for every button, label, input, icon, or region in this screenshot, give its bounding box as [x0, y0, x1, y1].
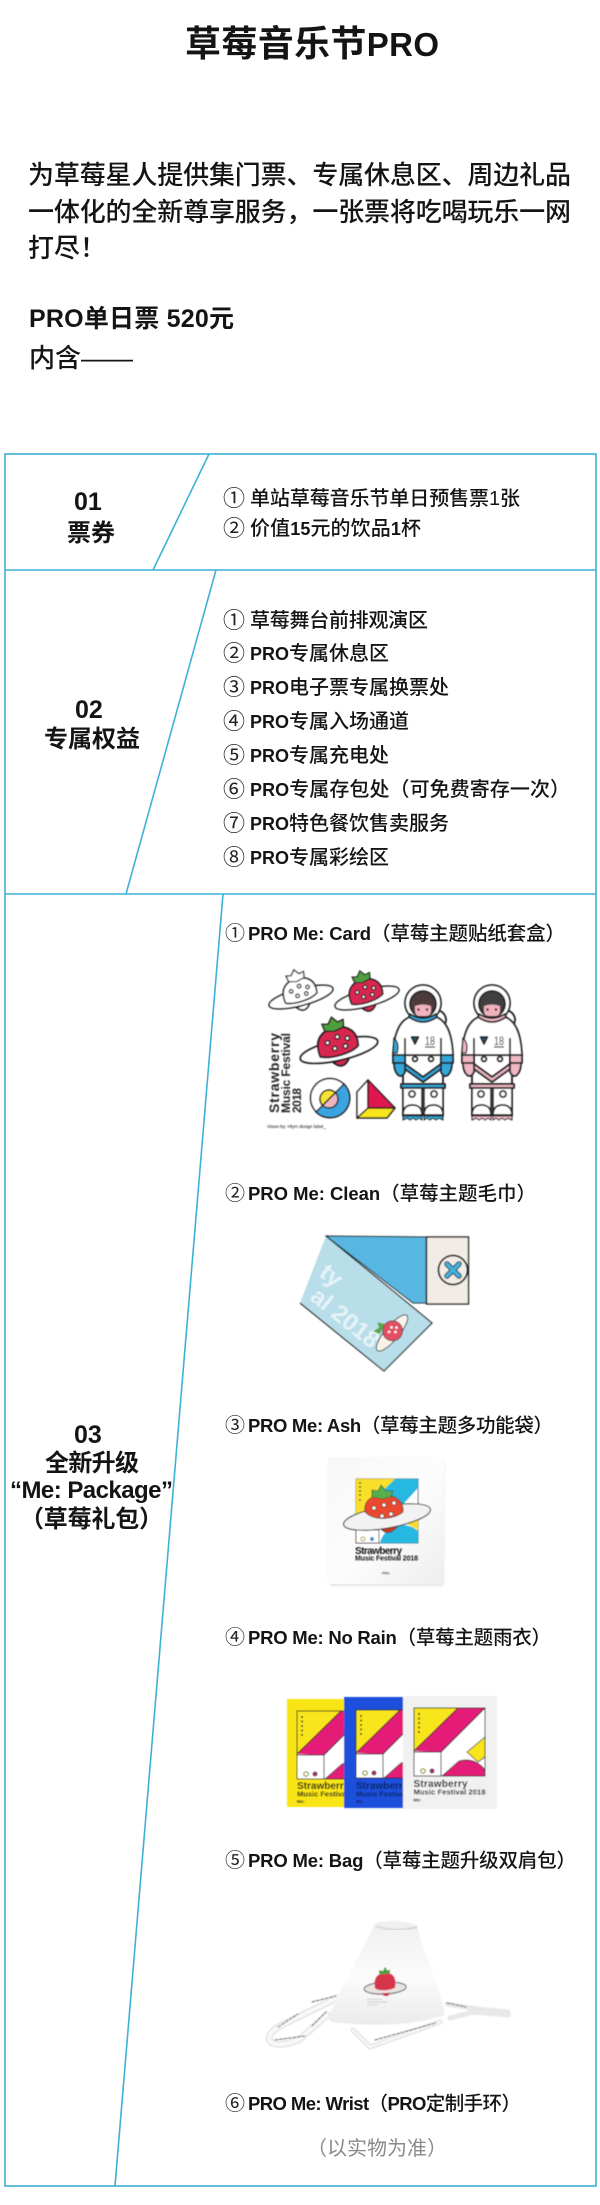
item 3 heading: PRO Me: Ash（草莓主题多功能袋） [248, 1415, 553, 1437]
price line: PRO单日票 520元 [29, 305, 234, 333]
towel cream end [426, 1237, 468, 1304]
row 03 label: “Me: Package” [10, 1477, 173, 1504]
white pack: Music Festival 2018 [414, 1788, 486, 1796]
row 02 list: PRO专属休息区 [250, 642, 389, 665]
row 02 list: 草莓舞台前排观演区 [250, 609, 428, 632]
intro paragraph: 一体化的全新尊享服务，一张票将吃喝玩乐一网 [28, 197, 571, 227]
row 02 list: PRO特色餐饮售卖服务 [250, 812, 449, 835]
illustration: drawstring backpack [269, 1921, 508, 2047]
row 02 list: PRO专属充电处 [250, 744, 389, 767]
blue pack: Me: [356, 1799, 364, 1804]
row 01 list [223, 486, 520, 541]
sticker: festival wordmark: 2018 [290, 1088, 304, 1113]
towel planet [363, 1304, 414, 1356]
sticker: large red planet [293, 1008, 381, 1074]
row 02 list: PRO专属彩绘区 [250, 846, 389, 869]
row 01 list: 单站草莓音乐节单日预售票1张 [250, 487, 520, 510]
panel: row 03 gift package [10, 922, 576, 2160]
yellow pack [287, 1699, 368, 1807]
row 02 label: 专属权益 [44, 726, 140, 753]
sticker: 3D triangle block [357, 1080, 395, 1118]
sticker: festival wordmark [266, 1033, 304, 1113]
blue pack: Strawberry [356, 1781, 409, 1792]
backpack small print [367, 1999, 387, 2005]
illustration: raincoat packs [287, 1696, 497, 1809]
row 03 label [10, 1421, 173, 1533]
row 02 list: ⑥ [223, 777, 245, 802]
row 02 list: ⑧ [223, 845, 245, 870]
row 02 list: ① [223, 608, 245, 633]
intro paragraph: 为草莓星人提供集门票、专属休息区、周边礼品 [28, 160, 571, 190]
item 1 heading: PRO Me: Card（草莓主题贴纸套盒） [248, 923, 565, 945]
row 01 list: ② [223, 516, 245, 541]
pouch shadow [329, 1459, 444, 1586]
sticker: red planet [328, 962, 402, 1019]
row 03 label: 03 [74, 1421, 102, 1449]
intro paragraph: 打尽！ [28, 233, 106, 263]
row 01 label: 01 [74, 488, 102, 516]
row 01 label [67, 488, 115, 547]
row 03 label: （草莓礼包） [20, 1506, 163, 1533]
sticker: pink astronaut: 18 [494, 1034, 504, 1048]
towel blue panel [326, 1236, 426, 1303]
backpack drawstring neck [376, 1926, 417, 1930]
backpack body [328, 1921, 445, 2025]
pouch logo: PRO [382, 1572, 390, 1576]
includes line: 内含—— [29, 343, 133, 373]
pouch logo [342, 1479, 432, 1576]
sticker: blue astronaut [393, 985, 453, 1120]
illustration: multipurpose pouch [328, 1457, 444, 1586]
intro paragraph [28, 160, 571, 263]
item 1 heading: ① [225, 922, 245, 945]
row 02 list: ⑦ [223, 811, 245, 836]
item 6 heading: ⑥ [225, 2092, 245, 2115]
row 03 label: 全新升级 [45, 1450, 139, 1477]
towel printed text: al 2018 [305, 1283, 384, 1354]
illustration: towel [300, 1236, 468, 1371]
row 01 label: 票券 [67, 520, 115, 547]
blue pack [344, 1697, 427, 1808]
row 01 list: ① [223, 486, 245, 511]
sticker: festival wordmark: Strawberry [266, 1033, 282, 1113]
pouch body [328, 1457, 444, 1584]
table panel [5, 454, 596, 2186]
item 4 heading: PRO Me: No Rain（草莓主题雨衣） [248, 1627, 551, 1649]
towel x button [438, 1256, 468, 1284]
table frame [5, 454, 596, 2186]
credit line: Vision by: Hlym design label_ [267, 1124, 326, 1129]
item 2 heading: PRO Me: Clean（草莓主题毛巾） [248, 1183, 536, 1205]
backpack straps [269, 1996, 508, 2047]
item 6 heading: PRO Me: Wrist（PRO定制手环） [248, 2093, 521, 2115]
towel light blue band [300, 1236, 432, 1371]
row 02 list: ⑤ [223, 743, 245, 768]
white pack: Strawberry [414, 1779, 468, 1790]
item 5 heading: ⑤ [225, 1849, 245, 1872]
pouch logo: Strawberry [355, 1546, 402, 1557]
yellow pack: Strawberry [297, 1781, 350, 1792]
panel: row 02 benefits [44, 608, 570, 870]
row 02 label [44, 696, 140, 753]
row 01 list: 价值15元的饮品1杯 [250, 517, 421, 540]
item 5 heading: PRO Me: Bag（草莓主题升级双肩包） [248, 1850, 576, 1872]
item 3 heading: ③ [225, 1414, 245, 1437]
row 02 list [223, 608, 570, 870]
sticker: circle logo [310, 1078, 350, 1118]
sticker: white planet [262, 961, 336, 1018]
yellow pack: Music Festival [297, 1790, 348, 1798]
title: 草莓音乐节PRO [185, 23, 439, 64]
backpack strawberry print [363, 1966, 407, 1997]
panel: row 01 tickets [67, 486, 520, 547]
row 02 list: ③ [223, 675, 245, 700]
item 2 heading: ② [225, 1182, 245, 1205]
sticker: festival wordmark: Music Festival [279, 1033, 293, 1113]
blue pack: Music Festival [356, 1790, 407, 1798]
sticker: pink astronaut [462, 985, 522, 1120]
illustration: sticker set [262, 961, 522, 1129]
row 02 list: ④ [223, 709, 245, 734]
pouch logo: Music Festival 2018 [355, 1556, 418, 1562]
white pack: Me: [414, 1798, 422, 1802]
row 02 list: PRO电子票专属换票处 [250, 676, 449, 699]
sticker: blue astronaut: 18 [425, 1034, 435, 1048]
item 4 heading: ④ [225, 1626, 245, 1649]
white pack [403, 1696, 497, 1809]
row 02 list: PRO专属存包处（可免费寄存一次） [250, 778, 570, 801]
row 02 list: PRO专属入场通道 [250, 710, 409, 733]
disclaimer note: （以实物为准） [307, 2137, 447, 2160]
yellow pack: Me: [297, 1799, 305, 1804]
towel printed text: ty [314, 1259, 348, 1294]
towel printed text [310, 1264, 380, 1348]
row 02 label: 02 [75, 696, 103, 724]
row 02 list: ② [223, 641, 245, 666]
